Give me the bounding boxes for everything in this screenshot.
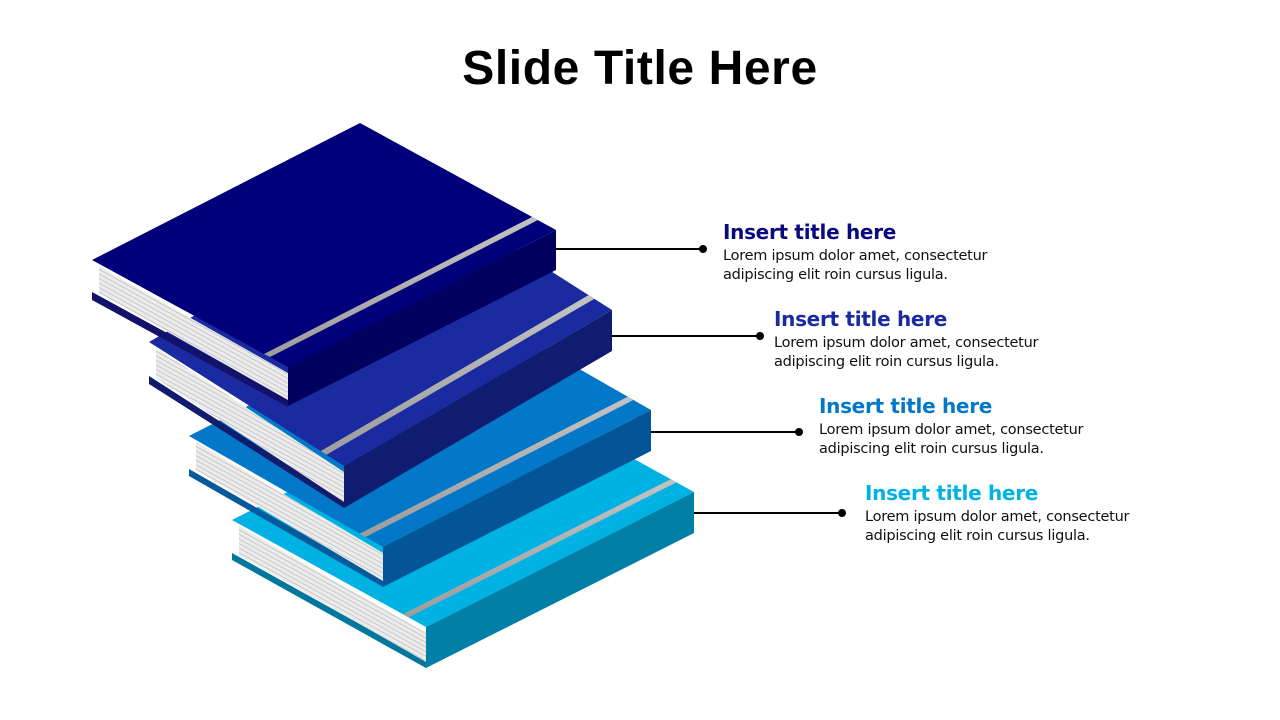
text block 2: Lorem ipsum dolor amet, consectetur [774, 335, 1038, 351]
text block 3: adipiscing elit roin cursus ligula. [819, 441, 1044, 457]
connector lines [556, 249, 842, 513]
text block 4: Insert title here [865, 481, 1038, 505]
text block 2: Insert title here [774, 307, 947, 331]
text block 2: adipiscing elit roin cursus ligula. [774, 354, 999, 370]
text block 1 [723, 220, 988, 283]
book 1 [92, 123, 556, 407]
book 4 [232, 385, 694, 668]
text block 2 [774, 307, 1038, 370]
text block 3: Insert title here [819, 394, 992, 418]
text block 4: adipiscing elit roin cursus ligula. [865, 528, 1090, 544]
text block 4 [865, 481, 1130, 544]
text block 4: Lorem ipsum dolor amet, consectetur [865, 509, 1129, 525]
text block 3 [819, 394, 1084, 457]
title: Slide Title Here [462, 42, 818, 95]
text block 1: Lorem ipsum dolor amet, consectetur [723, 248, 987, 264]
text block 3: Lorem ipsum dolor amet, consectetur [819, 422, 1083, 438]
book 3 [189, 299, 651, 587]
book 2 [149, 186, 612, 508]
text block 1: adipiscing elit roin cursus ligula. [723, 267, 948, 283]
text block 1: Insert title here [723, 220, 896, 244]
